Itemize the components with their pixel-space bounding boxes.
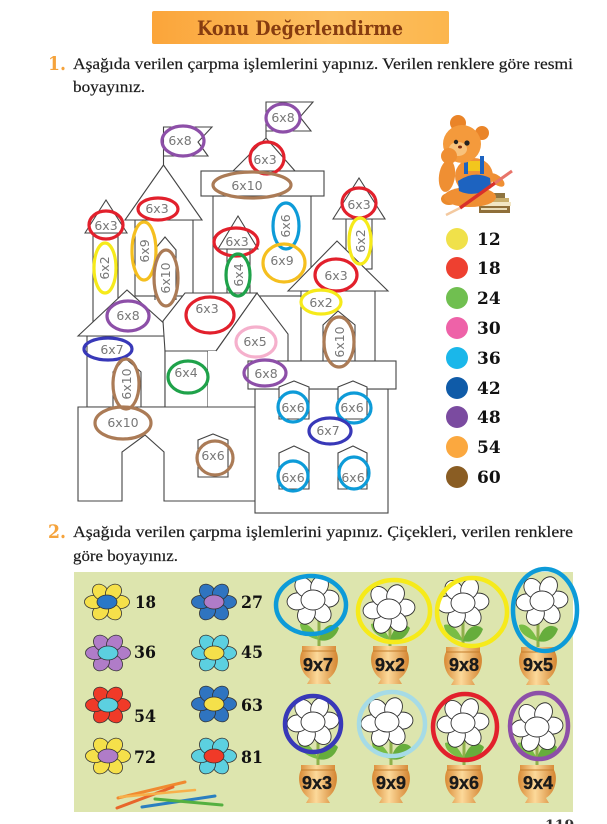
castle multiplication ovals: 6x8 [116,308,140,323]
left roofed tower [78,290,178,407]
question 1 text: 1. [48,53,66,75]
castle multiplication ovals: 6x3 [324,268,348,283]
castle multiplication ovals: 6x3 [195,301,219,316]
color legend: 48 [477,408,501,428]
left flag [164,127,212,165]
castle multiplication ovals: 6x10 [119,368,134,400]
tall left tower [125,165,202,300]
castle multiplication ovals: 6x3 [225,234,249,249]
castle multiplication ovals: 6x9 [270,253,294,268]
castle multiplication ovals: 6x3 [94,218,118,233]
icon: pencils [117,782,222,808]
castle multiplication ovals: 6x6 [281,470,305,485]
castle multiplication ovals: 6x10 [107,415,139,430]
castle multiplication ovals: 6x9 [137,239,152,263]
castle multiplication ovals: 6x2 [97,256,112,280]
castle multiplication ovals: 6x8 [254,366,278,381]
color legend: 18 [477,259,501,279]
castle multiplication ovals: 6x3 [347,197,371,212]
question 1 text: boyayınız. [73,79,145,96]
flower key: 72 [134,748,156,768]
flower key: 54 [134,707,156,727]
castle multiplication ovals: 6x3 [253,152,277,167]
castle multiplication ovals: 6x6 [340,400,364,415]
flower pots bottom row: 9x3 [302,773,332,793]
castle multiplication ovals [84,104,376,491]
title banner: Konu Değerlendirme [197,17,403,40]
flower pots bottom row [285,692,568,803]
castle multiplication ovals: 6x7 [100,342,124,357]
flower key: 18 [135,593,156,613]
color legend: 54 [477,438,501,458]
flower key: 81 [241,748,263,768]
castle multiplication ovals: 6x2 [353,229,368,253]
right roofed tower [288,241,388,363]
flower pots bottom row: 9x9 [376,773,406,793]
color legend: 30 [477,319,501,339]
flower key: 27 [241,593,263,613]
question 2 text: Aşağıda verilen çarpma işlemlerini yapınız. Çiçekleri, verilen renklere [73,524,573,541]
flower pots top row [276,569,577,685]
question 2 text [48,521,573,565]
castle multiplication ovals: 6x3 [145,201,169,216]
castle multiplication ovals: 6x10 [332,326,347,358]
far left tower [85,200,127,323]
castle multiplication ovals: 6x7 [316,423,340,438]
centre keep [201,138,324,296]
flower key: 63 [241,696,263,716]
color legend: 36 [477,349,501,369]
castle multiplication ovals: 6x6 [278,214,293,238]
color legend: 42 [477,379,501,399]
pencil [460,183,495,208]
flower pots top row: 9x8 [449,655,479,675]
question 2 text: göre boyayınız. [73,548,178,565]
castle drawing [78,102,396,513]
question 1 text: Aşağıda verilen çarpma işlemlerini yapınız. Verilen renklere göre resmi [73,56,574,73]
flower pots bottom row: 9x4 [523,773,553,793]
flower pots bottom row: 9x6 [449,773,479,793]
question 2 text: 2. [48,521,66,543]
middle building [163,293,288,407]
castle multiplication ovals: 6x10 [231,178,263,193]
castle multiplication ovals: 6x4 [174,365,198,380]
centre flag [266,102,313,138]
small centre tower [218,216,258,295]
castle multiplication ovals: 6x4 [231,263,246,287]
castle multiplication ovals: 6x6 [201,448,225,463]
castle multiplication ovals: 6x8 [168,133,192,148]
title banner [152,11,449,44]
castle multiplication ovals: 6x5 [243,334,267,349]
castle multiplication ovals: 6x2 [309,295,333,310]
lower gate building [78,407,256,501]
color legend: 12 [477,230,501,250]
color legend: 24 [477,289,501,309]
flower key [84,582,263,776]
castle multiplication ovals: 6x8 [271,110,295,125]
right back tower [333,178,385,269]
castle multiplication ovals: 6x10 [158,262,173,294]
color legend: 60 [477,468,501,488]
question 1 text [48,53,574,96]
icon: bear with books [437,115,512,215]
right building [248,361,396,513]
flower pots top row: 9x2 [375,655,405,675]
castle multiplication ovals: 6x6 [281,400,305,415]
flower key: 45 [241,643,263,663]
flower key: 36 [134,643,156,663]
books [477,193,511,213]
color legend [446,228,501,488]
panel: flowers [74,569,577,812]
flower pots top row: 9x7 [303,655,333,675]
castle multiplication ovals: 6x6 [341,470,365,485]
flower pots top row: 9x5 [523,655,553,675]
